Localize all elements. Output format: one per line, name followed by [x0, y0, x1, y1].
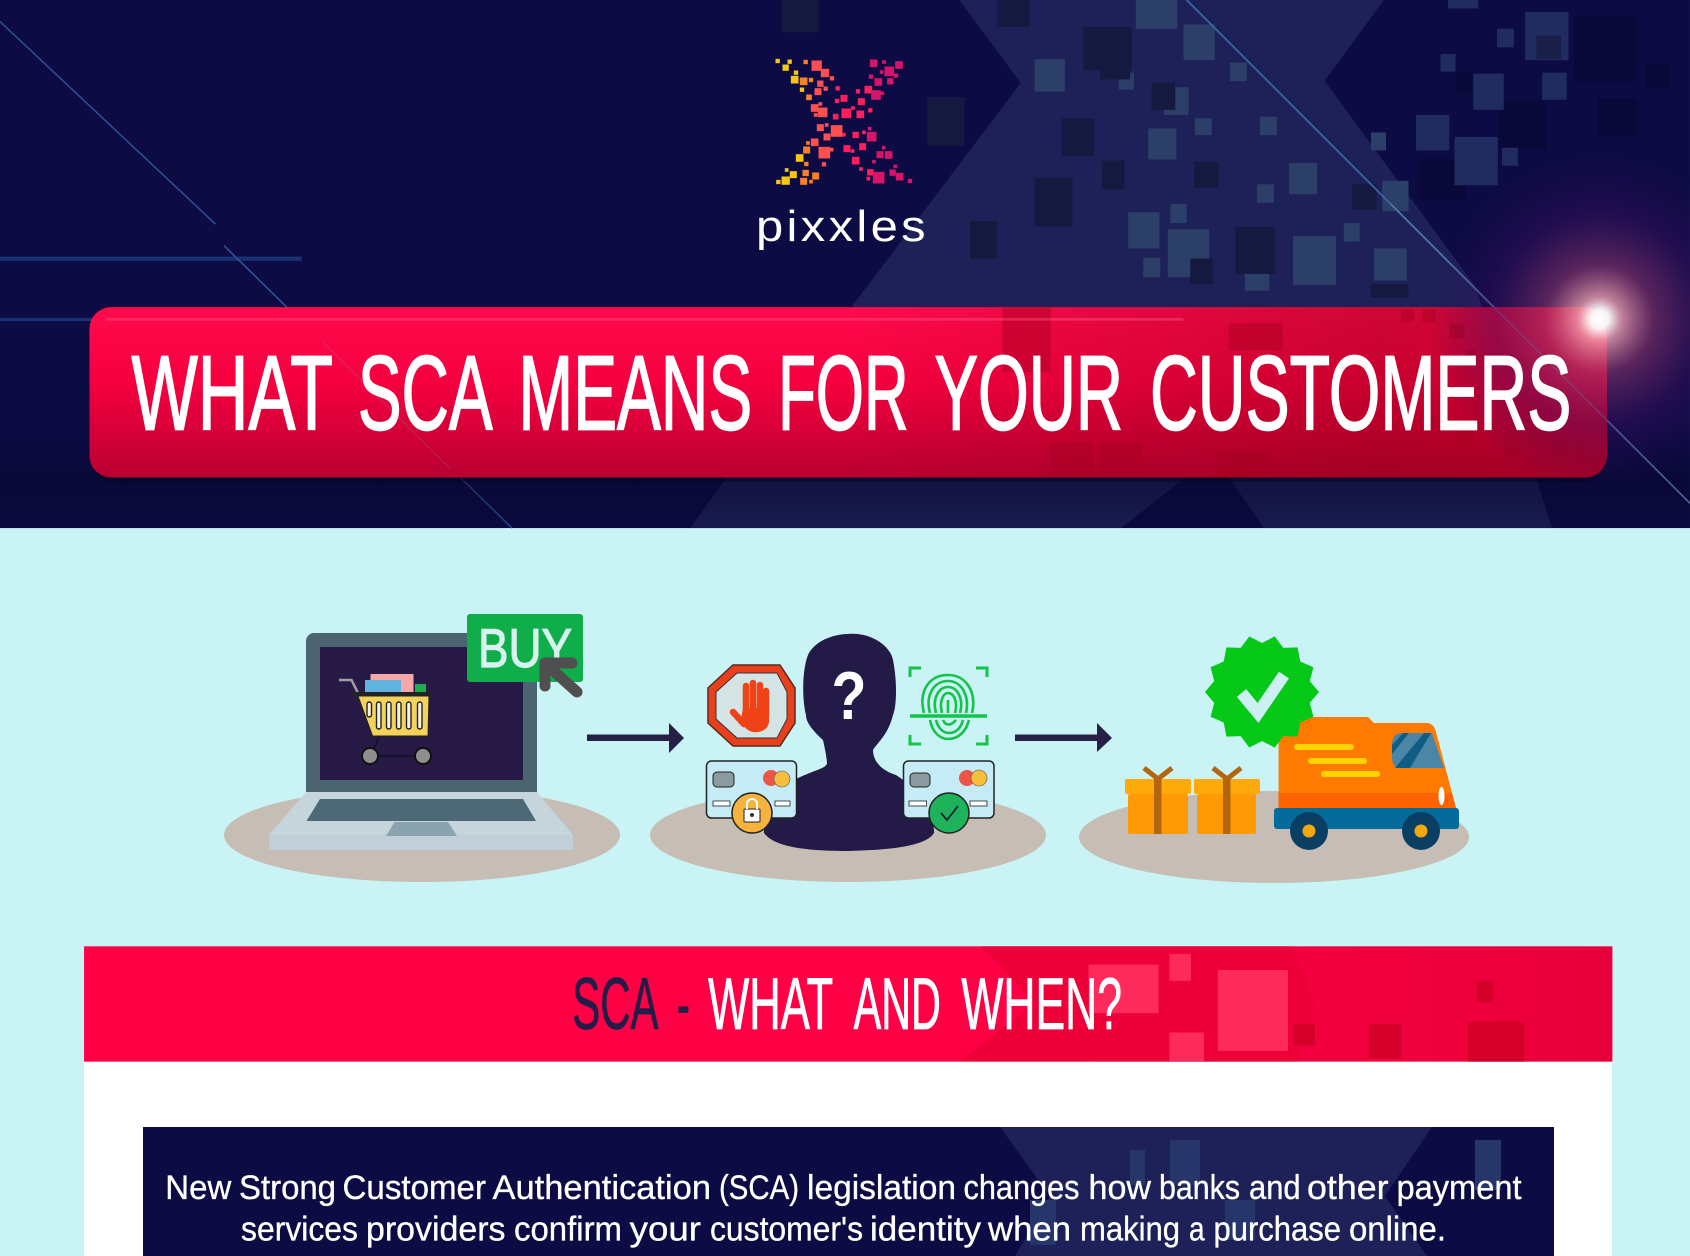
arrow 2: [1015, 723, 1112, 752]
intro text: other: [1307, 1169, 1388, 1207]
section heading: -: [677, 963, 690, 1045]
title banner: [89, 149, 1690, 503]
title text: [131, 335, 1571, 453]
delivery truck: [1274, 717, 1459, 850]
title text: MEANS: [518, 335, 752, 453]
intro text: online.: [1349, 1210, 1446, 1248]
step 2: authentication: [650, 634, 1046, 882]
section heading: WHEN?: [961, 963, 1122, 1045]
title text: YOUR: [934, 335, 1123, 453]
section heading: AND: [854, 963, 941, 1045]
platform ellipse: [650, 788, 1046, 882]
icon: verified badge: [1205, 636, 1319, 748]
intro text: making: [1080, 1210, 1180, 1248]
step 1: laptop shopping: [224, 614, 620, 882]
header background: [0, 0, 1690, 528]
customer silhouette: [764, 634, 934, 851]
intro text: confirm: [514, 1210, 622, 1248]
intro text: Authentication: [492, 1169, 711, 1207]
white panel: [84, 1062, 1612, 1256]
intro text: a: [1189, 1210, 1205, 1248]
header streaks and shade: [0, 0, 1690, 528]
icon: verified card: [904, 761, 994, 833]
intro text: legislation: [807, 1169, 956, 1207]
intro text: customer's: [710, 1210, 863, 1248]
intro text: Strong: [239, 1169, 336, 1207]
intro text: providers: [366, 1210, 506, 1248]
icon: stop hand: [708, 665, 795, 746]
intro text: when: [987, 1210, 1071, 1248]
intro text: changes: [964, 1169, 1080, 1207]
illustration: purchase journey: [84, 614, 1612, 1256]
intro text: (SCA): [719, 1169, 799, 1207]
arrow 1: [587, 723, 684, 753]
intro text: New: [165, 1169, 232, 1207]
intro text: services: [241, 1210, 358, 1248]
section heading: WHAT: [708, 963, 833, 1045]
title text: WHAT: [131, 335, 333, 453]
intro text: and: [1249, 1169, 1301, 1207]
BUY button: BUY: [478, 617, 572, 679]
intro text: purchase: [1214, 1210, 1341, 1248]
intro text: banks: [1159, 1169, 1240, 1207]
section header band: [84, 946, 1612, 1063]
section heading: [572, 963, 1122, 1045]
section panel: SCA what and when: [84, 946, 1612, 1256]
icon: shopping cart: [339, 674, 431, 764]
logo wordmark: pixxles: [756, 202, 929, 251]
intro text: how: [1088, 1169, 1151, 1207]
intro text: identity: [870, 1210, 981, 1248]
intro panel: [143, 1127, 1554, 1256]
intro text: your: [630, 1210, 701, 1248]
intro text: [165, 1169, 1522, 1248]
gift boxes: [1125, 768, 1260, 834]
icon: mouse cursor: [545, 663, 577, 692]
title text: SCA: [358, 335, 493, 453]
question mark: ?: [832, 658, 866, 734]
intro text: payment: [1396, 1169, 1522, 1207]
lens flare: [1429, 149, 1690, 489]
step 3: delivery: [1079, 636, 1469, 883]
section heading: SCA: [572, 963, 659, 1045]
intro text: Customer: [342, 1169, 486, 1207]
title text: FOR: [778, 335, 909, 453]
icon: fingerprint scan: [910, 668, 987, 744]
header squares right: [1100, 0, 1670, 297]
platform ellipse: [1079, 791, 1469, 883]
laptop: [269, 633, 573, 850]
icon: pixel X mark: [776, 59, 912, 184]
platform ellipse: [224, 788, 620, 882]
icon: locked card: [706, 761, 796, 833]
logo: pixxles: [756, 59, 929, 251]
